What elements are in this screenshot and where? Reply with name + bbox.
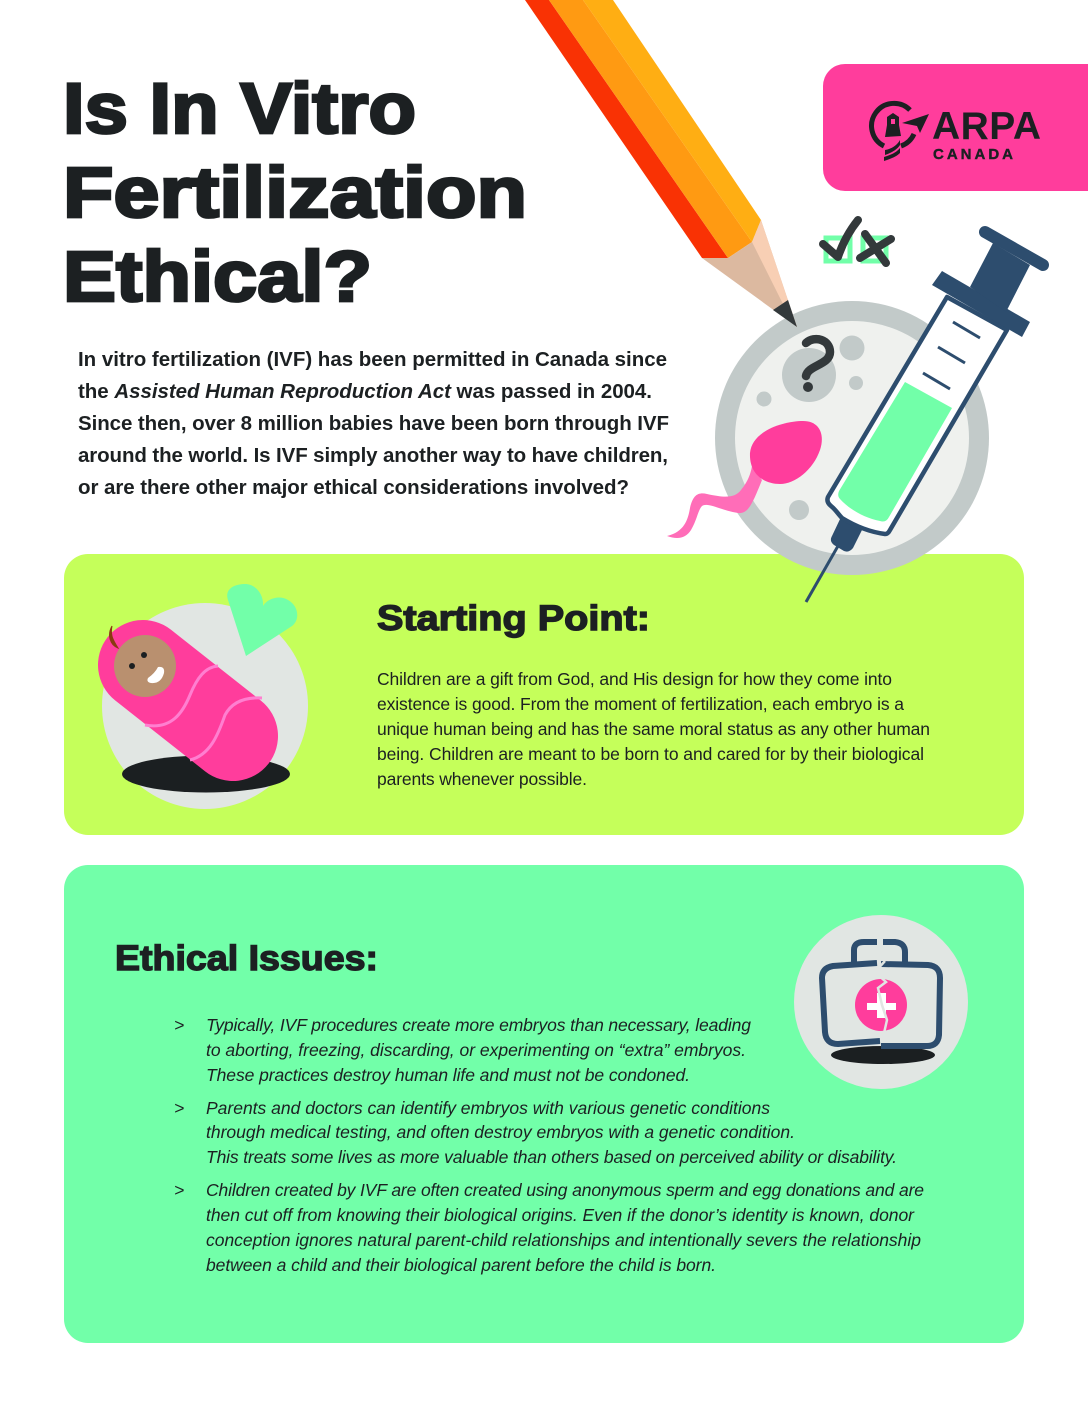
bullet 3: Children created by IVF are often created using anonymous sperm and egg donations and are [206, 1180, 924, 1200]
bullet 2: This treats some lives as more valuable than others based on perceived ability or disability. [206, 1147, 897, 1167]
bullet 3: > [174, 1180, 184, 1200]
intro paragraph: around the world. Is IVF simply another way to have children, [78, 444, 668, 467]
title: Is In Vitro [63, 70, 416, 149]
heading: starting point: Starting Point: [377, 599, 650, 638]
question mark [803, 339, 830, 392]
bullet 2: > [174, 1098, 184, 1118]
text: starting point body: being. Children are meant to be born to and cared for by their biological [377, 744, 924, 764]
petri dish [715, 301, 989, 575]
bullet 1: to aborting, freezing, discarding, or experimenting on “extra” embryos. [206, 1040, 746, 1060]
intro paragraph: the Assisted Human Reproduction Act was passed in 2004. [78, 380, 652, 403]
title: Fertilization [63, 154, 527, 233]
intro paragraph [78, 348, 669, 499]
bullet 1: > [174, 1015, 184, 1035]
bullet 1: These practices destroy human life and must not be condoned. [206, 1065, 690, 1085]
bullet 2 [174, 1098, 897, 1167]
bullet 2: Parents and doctors can identify embryos with various genetic conditions [206, 1098, 770, 1118]
panel: ethical issues [115, 915, 968, 1275]
logo badge: CANADA [933, 146, 1013, 163]
icon: check and cross [823, 220, 891, 263]
title: Ethical? [63, 238, 372, 317]
intro paragraph: Since then, over 8 million babies have been born through IVF [78, 412, 669, 435]
bullet 3: then cut off from knowing their biological origins. Even if the donor’s identity is known, donor [206, 1205, 915, 1225]
bullet 1: Typically, IVF procedures create more embryos than necessary, leading [206, 1015, 751, 1035]
bullet 3: between a child and their biological parent before the child is born. [206, 1255, 716, 1275]
logo badge [823, 64, 1088, 191]
icon: broken medical case [794, 915, 968, 1089]
bullet 3: conception ignores natural parent-child relationships and intentionally severs the relationship [206, 1230, 921, 1250]
text: starting point body: Children are a gift from God, and His design for how they come into [377, 669, 892, 689]
bullet 3 [174, 1180, 924, 1275]
text: starting point body: parents whenever possible. [377, 769, 587, 789]
bullet 1 [174, 1015, 751, 1085]
panel: ethical issues background [64, 865, 1024, 1343]
intro paragraph: or are there other major ethical considerations involved? [78, 476, 629, 499]
text: starting point body: existence is good. From the moment of fertilization, each embryo is a [377, 694, 904, 714]
panel: starting point background [64, 554, 1024, 835]
icon: baby [102, 584, 308, 809]
intro paragraph: In vitro fertilization (IVF) has been permitted in Canada since [78, 348, 667, 371]
sperm [667, 421, 822, 538]
text: starting point body [377, 669, 930, 789]
bullet 2: through medical testing, and often destroy embryos with a genetic condition. [206, 1122, 795, 1142]
pencil [525, 0, 797, 327]
syringe [806, 232, 1043, 602]
heading: ethical issues: Ethical Issues: [115, 939, 378, 978]
logo badge: ARPA [932, 105, 1041, 148]
title [63, 70, 527, 317]
text: starting point body: unique human being and has the same moral status as any other human [377, 719, 930, 739]
panel: starting point [102, 584, 930, 809]
